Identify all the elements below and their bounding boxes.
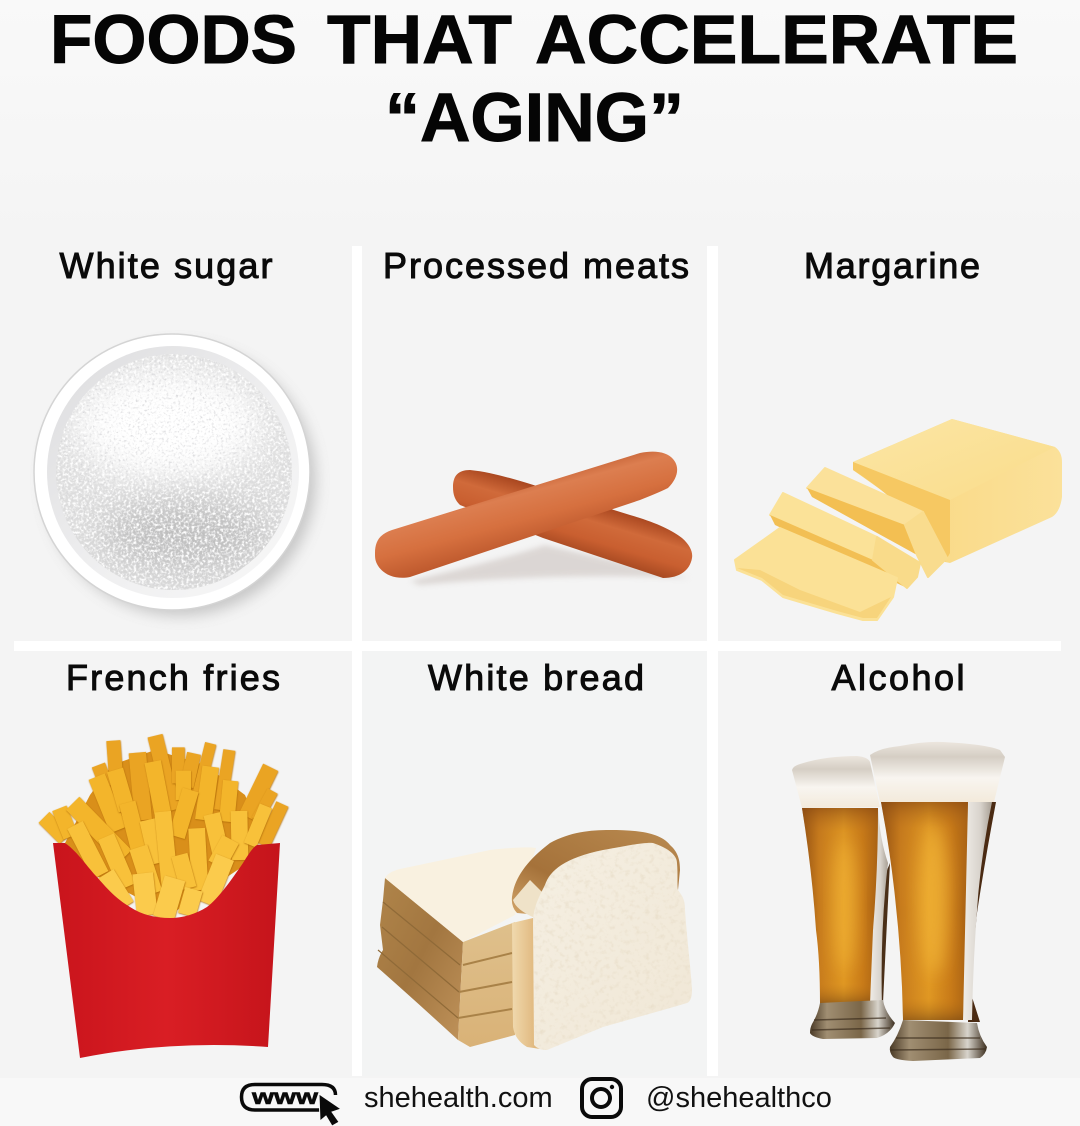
panel: alcohol [718,651,1080,1076]
panel: processed meats [362,245,707,641]
fries [44,736,282,918]
title: ACCELERATE [535,1,1018,78]
label: french fries: French fries [66,657,280,698]
icon: sugar bowl [34,334,316,616]
icon: fries in red carton [44,736,282,1058]
slice 3 [807,468,923,525]
label: processed meats: Processed meats [383,245,689,286]
website: shehealth.com [364,1082,553,1114]
icon: margarine block and slices [735,419,1062,620]
left glass [792,756,895,1039]
label: margarine: Margarine [804,245,980,286]
white dividers [14,246,1061,1076]
icon: sliced white bread [377,830,692,1050]
footer [0,1078,1080,1126]
front slice [512,918,547,1050]
icon: www cursor: www [251,1086,319,1109]
title: THAT [327,1,512,78]
red carton [53,843,280,1058]
label: white bread: White bread [428,657,644,698]
icon: two beer glasses [792,742,1005,1061]
panel: white sugar [33,252,322,622]
title [50,1,1018,156]
slice 1 [735,528,897,620]
stacked slices [377,878,463,1040]
label: alcohol: Alcohol [832,657,964,698]
title: FOODS [50,1,297,78]
big block [853,419,1062,563]
slice 2 [770,493,877,560]
title: “AGING” [385,79,684,156]
icon: sausages [375,452,692,585]
panel: margarine [718,245,1080,641]
fries base [65,750,262,915]
panel: white bread [362,651,707,1076]
label: white sugar: White sugar [60,245,272,286]
icon: instagram [582,1079,621,1117]
icon: www cursor [242,1084,341,1126]
panel: french fries [0,651,352,1076]
instagram handle: @shehealthco [646,1082,832,1114]
right glass [870,742,1005,1061]
